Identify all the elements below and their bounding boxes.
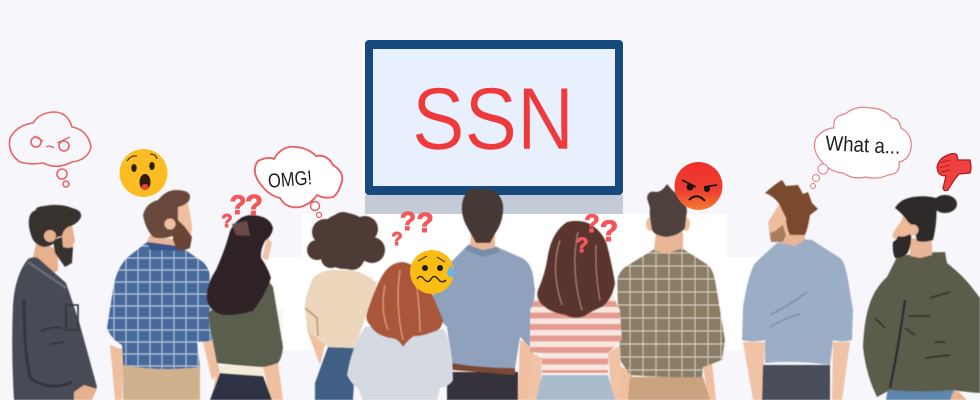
thought bubble: What a...	[810, 107, 911, 188]
thought bubble: OMG	[255, 147, 342, 218]
person: man in olive plaid shirt	[617, 184, 725, 400]
person: curly hair woman in beige shirt	[305, 212, 385, 400]
emoji: worried face with sweat	[410, 250, 455, 294]
question marks: woman in olive: ?	[222, 211, 232, 231]
emoji: angry red face	[674, 162, 722, 210]
question marks: curly hair woman	[392, 206, 434, 249]
monitor	[365, 40, 623, 214]
OMG text: OMG!	[267, 167, 313, 193]
question marks: curly hair woman: ?	[416, 207, 434, 238]
question marks: striped top woman: ?	[576, 234, 588, 257]
question marks: striped top woman	[576, 210, 618, 257]
question marks: curly hair woman: ?	[400, 206, 416, 236]
question marks: striped top woman: ?	[584, 210, 600, 238]
question marks: woman in olive: ?	[230, 190, 246, 220]
monitor title: SSN: SSN	[412, 69, 574, 168]
person: center man in blue-grey shirt	[432, 188, 535, 400]
question marks: woman in olive	[222, 190, 263, 231]
icon: thumbs down	[937, 154, 971, 191]
person: man in light blue shirt	[742, 180, 853, 400]
person: woman with wavy hair and striped top	[528, 221, 622, 400]
question marks: woman in olive: ?	[245, 190, 263, 222]
person: woman with long dark hair and olive jacket	[207, 215, 283, 400]
person: woman with auburn hair and grey sweater	[347, 262, 453, 400]
person: man with bun and olive jacket	[863, 195, 980, 400]
question marks: curly hair woman: ?	[392, 229, 402, 249]
emoji: surprised face	[120, 149, 168, 197]
person: man in dark denim jacket	[12, 205, 97, 400]
thought bubble: angry face	[9, 112, 91, 187]
question marks: striped top woman: ?	[600, 215, 618, 248]
What a... text: What a...	[825, 132, 901, 159]
person: man in blue plaid shirt	[107, 190, 220, 400]
